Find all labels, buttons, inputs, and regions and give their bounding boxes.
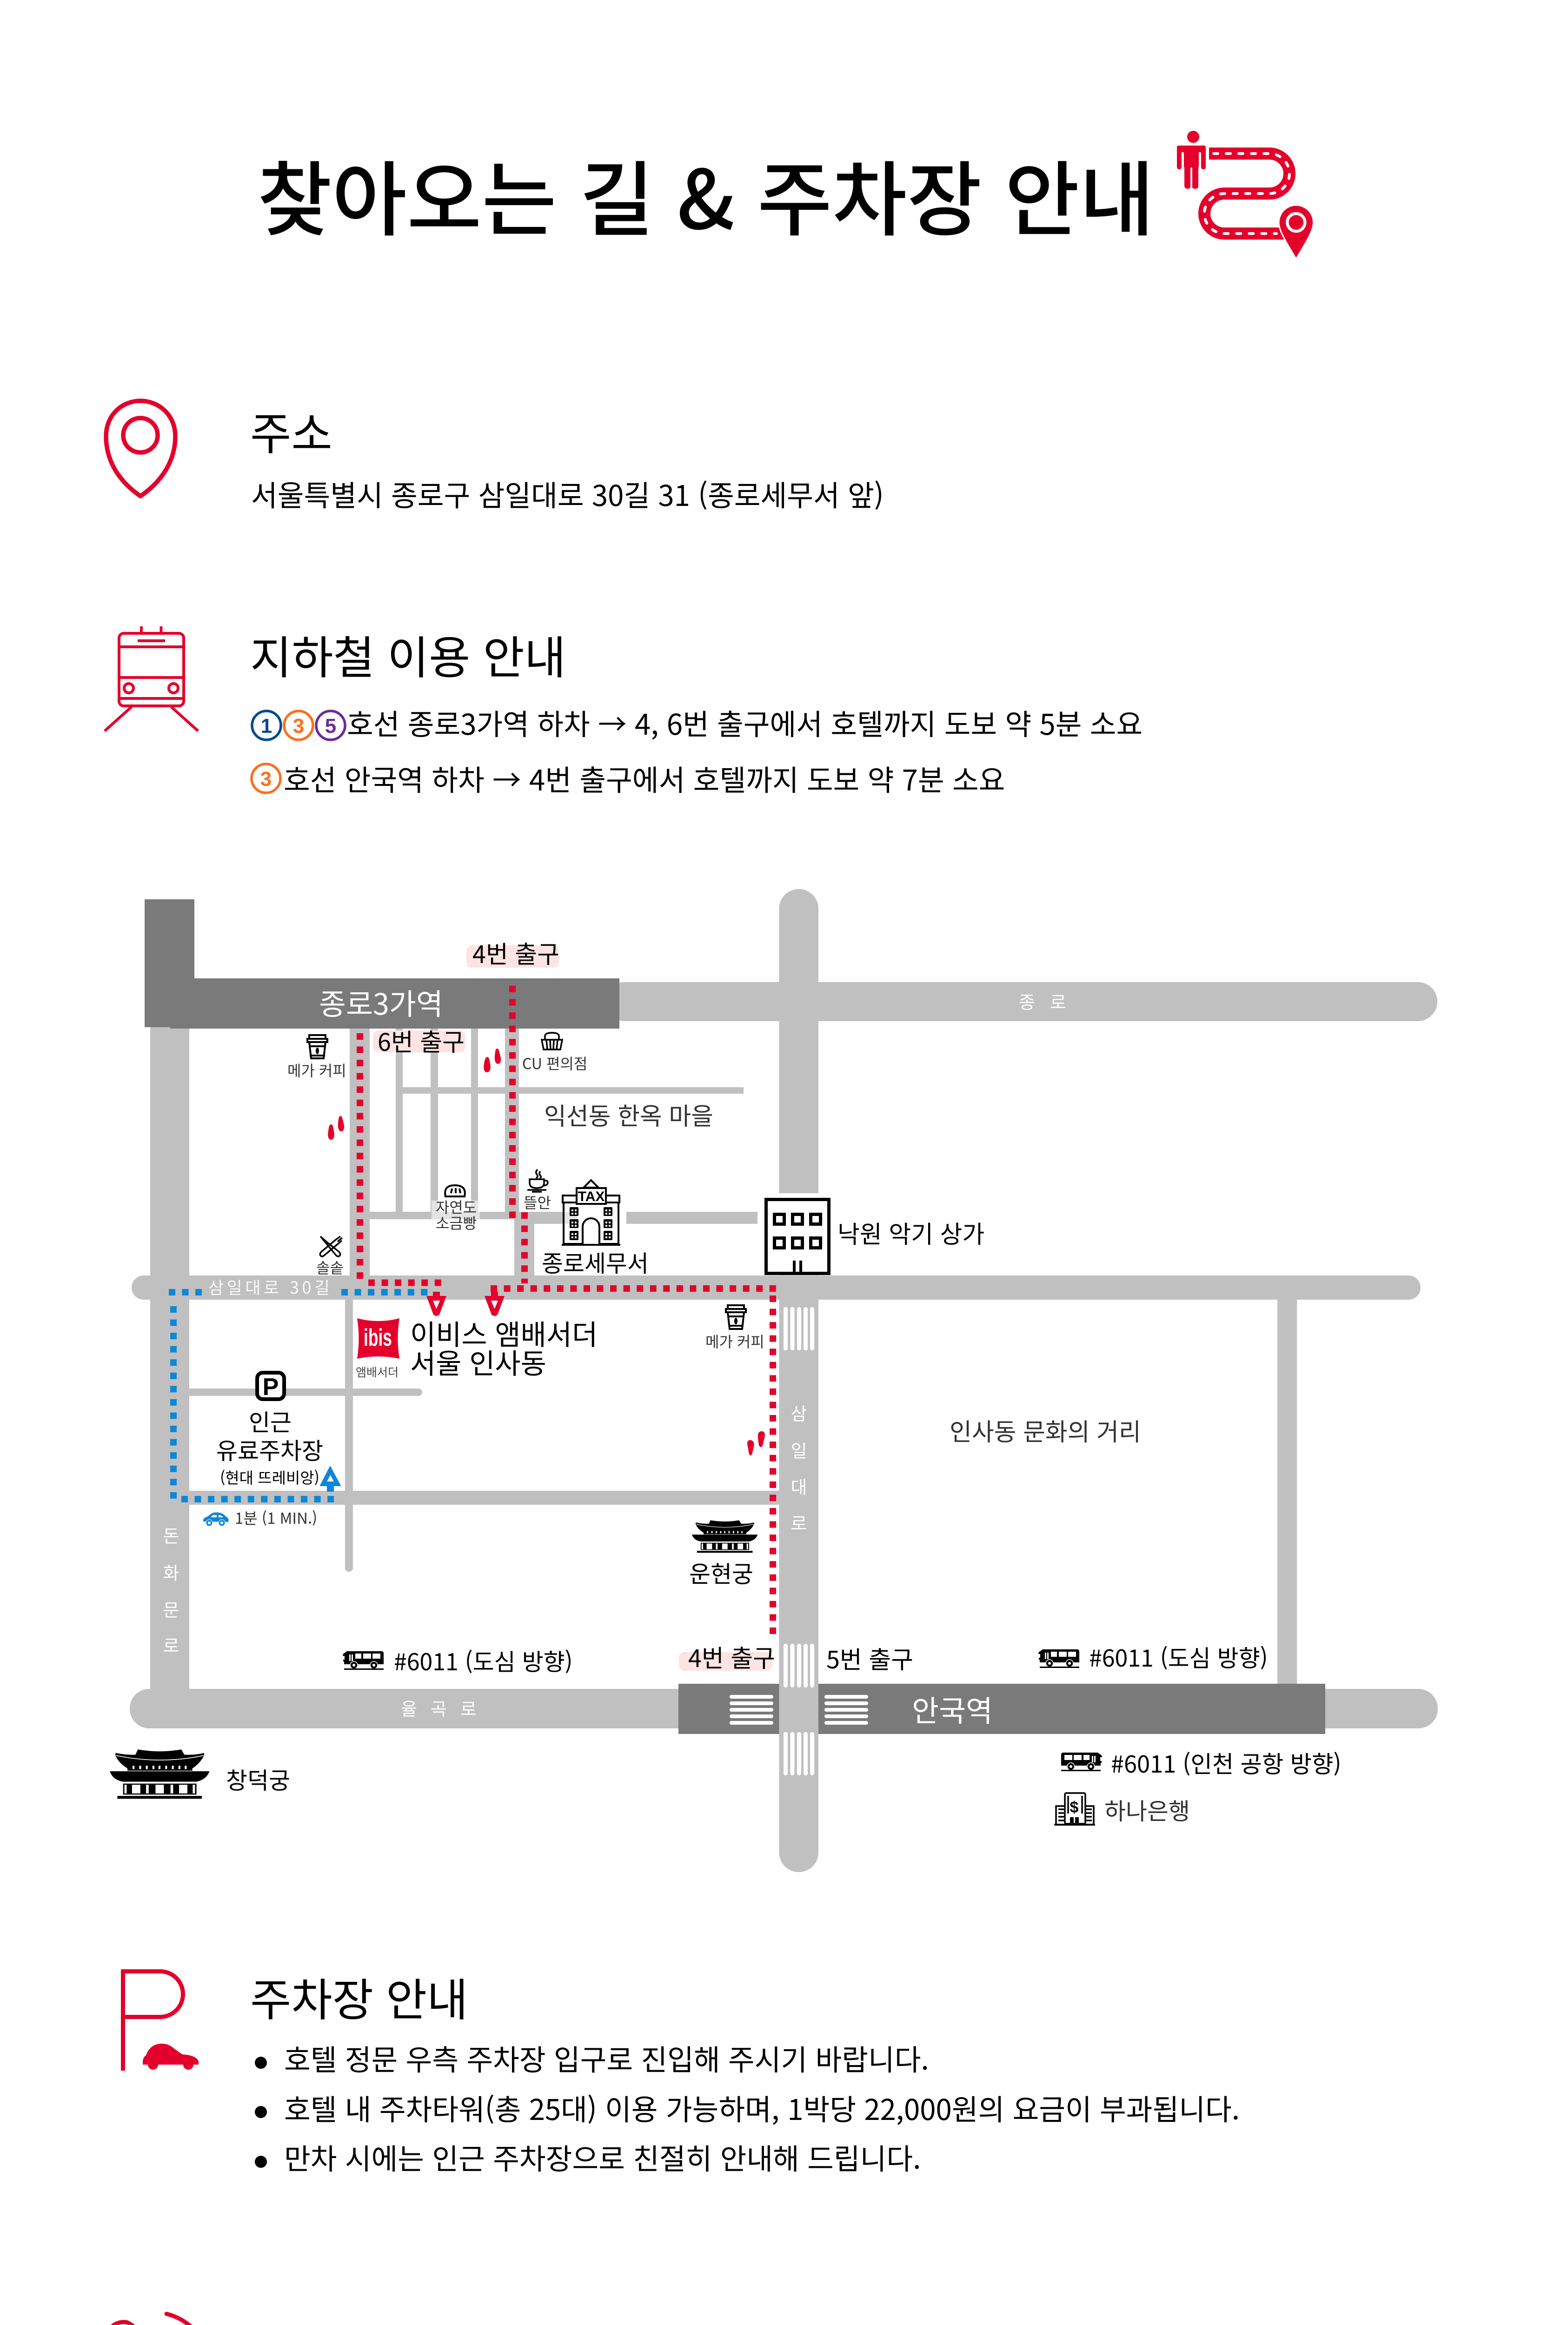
label: one minute: 1분 (1 MIN.) — [235, 1506, 317, 1528]
subway line 1 row: 1 — [261, 715, 272, 737]
heading: subway: 지하철 이용 안내 — [250, 621, 566, 687]
label: exit 4 Jongno: 4번 출구 — [472, 935, 559, 970]
icon: phone — [104, 2314, 211, 2325]
road label: Samil-daero: 일 — [791, 1437, 807, 1462]
label: exit 4 Anguk: 4번 출구 — [688, 1639, 775, 1674]
icon: subway train — [105, 626, 198, 731]
label: Hana Bank: 하나은행 — [1104, 1793, 1190, 1827]
road label: Donhwamun-ro — [163, 1522, 179, 1657]
icon: bank — [1054, 1793, 1095, 1826]
driving route — [169, 1292, 429, 1499]
label: nearby paid parking — [216, 1404, 323, 1488]
label: Jongno tax office: 종로세무서 — [542, 1245, 649, 1279]
icon: parking sign — [257, 1373, 284, 1401]
road label: Donhwamun-ro: 화 — [163, 1559, 179, 1585]
icon: tax office: TAX — [578, 1189, 605, 1204]
road label: Donhwamun-ro: 문 — [163, 1596, 179, 1621]
walking route from Jongno 3-ga exit 4 — [491, 986, 777, 1635]
label: Mega Coffee: 메가 커피 — [287, 1059, 346, 1081]
subway line 1 row: 호선 종로3가역 하차 → 4, 6번 출구에서 호텔까지 도보 약 5분 소요 — [347, 701, 1143, 743]
label: Jayeondo salt bread: 자연도 — [436, 1196, 477, 1217]
parking bullet list: 호텔 내 주차타워(총 25대) 이용 가능하며, 1박당 22,000원의 요금이 부과됩니다. — [284, 2086, 1240, 2128]
icon: Changdeokgung palace — [110, 1749, 209, 1799]
label: bus 6011 downtown left: #6011 (도심 방향) — [394, 1644, 573, 1677]
road label: Samil-daero: 대 — [791, 1473, 807, 1499]
label: Anguk station: 안국역 — [912, 1688, 993, 1730]
subway line 1 row: 5 — [325, 715, 336, 737]
label: bus 6011 airport: #6011 (인천 공항 방향) — [1111, 1745, 1341, 1780]
footprints 2 — [484, 1049, 501, 1072]
map roads — [130, 889, 1438, 1872]
icon: ibis logo — [357, 1318, 399, 1359]
parking bullet list: 호텔 정문 우측 주차장 입구로 진입해 주시기 바랍니다. — [284, 2037, 929, 2079]
icon: bread — [445, 1185, 465, 1196]
icon: blue car — [203, 1512, 229, 1526]
map — [110, 889, 1438, 1872]
road label: Samil-daero — [791, 1400, 807, 1535]
icon: ibis logo: ibis — [364, 1324, 392, 1351]
parking bullet list — [255, 2037, 1240, 2178]
Samil-daero crossing over Anguk — [779, 1679, 818, 1739]
subway line 2 row: 호선 안국역 하차 → 4번 출구에서 호텔까지 도보 약 7분 소요 — [284, 757, 1005, 799]
icon: walking route with person and pin — [1177, 131, 1313, 258]
arrow: hotel entrance 1 — [426, 1292, 446, 1316]
arrow: parking entrance — [320, 1467, 340, 1492]
label: hotel name — [410, 1313, 598, 1382]
arrow: hotel entrance 2 — [485, 1292, 505, 1316]
station bar: Anguk — [678, 1684, 1325, 1734]
label: Jayeondo salt bread — [432, 1196, 480, 1233]
label: nearby paid parking: 유료주차장 — [216, 1433, 323, 1466]
subway line 1 row: 3 — [293, 715, 304, 737]
road label: Samil-daero: 로 — [791, 1509, 807, 1535]
label: Solsot: 솔솥 — [316, 1256, 344, 1278]
label: ambassador under logo: 앰배서더 — [356, 1363, 399, 1380]
label: nearby paid parking: 인근 — [249, 1404, 292, 1438]
label: hotel name: 이비스 앰배서더 — [410, 1313, 598, 1353]
label: Changdeokgung: 창덕궁 — [226, 1762, 290, 1796]
label: Unhyeongung: 운현궁 — [689, 1556, 753, 1589]
subway line 2 row: 3 — [260, 768, 272, 790]
icon: bus airport — [1061, 1753, 1102, 1771]
road label: Donhwamun-ro: 로 — [163, 1632, 179, 1657]
icon: cafe cup — [527, 1169, 548, 1192]
road label: Donhwamun-ro: 돈 — [163, 1522, 179, 1548]
parking bullet list: 만차 시에는 인근 주차장으로 친절히 안내해 드립니다. — [284, 2136, 921, 2178]
footprints 3 — [747, 1431, 765, 1455]
crosswalk stripes — [730, 1307, 868, 1775]
label: nearby paid parking: (현대 뜨레비앙) — [220, 1466, 319, 1488]
icon: Mega Coffee cup 2 — [726, 1305, 746, 1329]
icon: bus right — [1038, 1649, 1079, 1668]
icon: Unhyeongung palace — [692, 1520, 757, 1553]
icon: Nakwon arcade building — [760, 1193, 831, 1275]
label: exit 5 Anguk: 5번 출구 — [826, 1641, 913, 1675]
heading: parking: 주차장 안내 — [250, 1964, 468, 2029]
footprints 1 — [328, 1116, 344, 1140]
road label: Jongno: 종로 — [1019, 988, 1066, 1014]
icon: Mega Coffee cup — [307, 1035, 327, 1058]
label: hotel name: 서울 인사동 — [410, 1342, 546, 1382]
walking route from Jongno 3-ga exit 6 — [360, 1033, 442, 1282]
icon: parking sign: P — [263, 1374, 279, 1401]
road label: Samil-daero 30-gil: 삼일대로 30길 — [208, 1275, 333, 1299]
label: Mega Coffee 2: 메가 커피 — [705, 1330, 764, 1352]
heading: address: 주소 — [250, 398, 332, 463]
label: Insadong culture street: 인사동 문화의 거리 — [950, 1413, 1141, 1448]
label: Ikseon-dong: 익선동 한옥 마을 — [544, 1097, 713, 1132]
title: 찾아오는 길 & 주차장 안내 — [257, 135, 1155, 252]
icon: parking P with car — [123, 1972, 199, 2071]
icon: CU basket — [542, 1033, 562, 1050]
label: CU: CU 편의점 — [522, 1052, 587, 1074]
address text: 서울특별시 종로구 삼일대로 30길 31 (종로세무서 앞) — [251, 472, 884, 514]
road label: Yulgok-ro: 율곡로 — [401, 1695, 477, 1720]
label: Nakwon arcade: 낙원 악기 상가 — [837, 1215, 984, 1250]
icon: tax office — [562, 1180, 620, 1245]
road label: Samil-daero: 삼 — [791, 1400, 807, 1425]
label: exit 6: 6번 출구 — [378, 1023, 465, 1058]
icon: bus left — [343, 1651, 384, 1670]
icon: address pin — [106, 401, 175, 496]
label: Tteuran: 뜰안 — [524, 1191, 551, 1213]
label: Jayeondo salt bread: 소금빵 — [436, 1212, 477, 1233]
label: Jongno 3-ga station: 종로3가역 — [319, 981, 443, 1023]
station bar: Jongno 3-ga — [145, 899, 619, 1029]
label: bus 6011 downtown right: #6011 (도심 방향) — [1089, 1640, 1268, 1674]
icon: bank: $ — [1070, 1799, 1079, 1816]
icon: fork and knife — [320, 1236, 342, 1256]
